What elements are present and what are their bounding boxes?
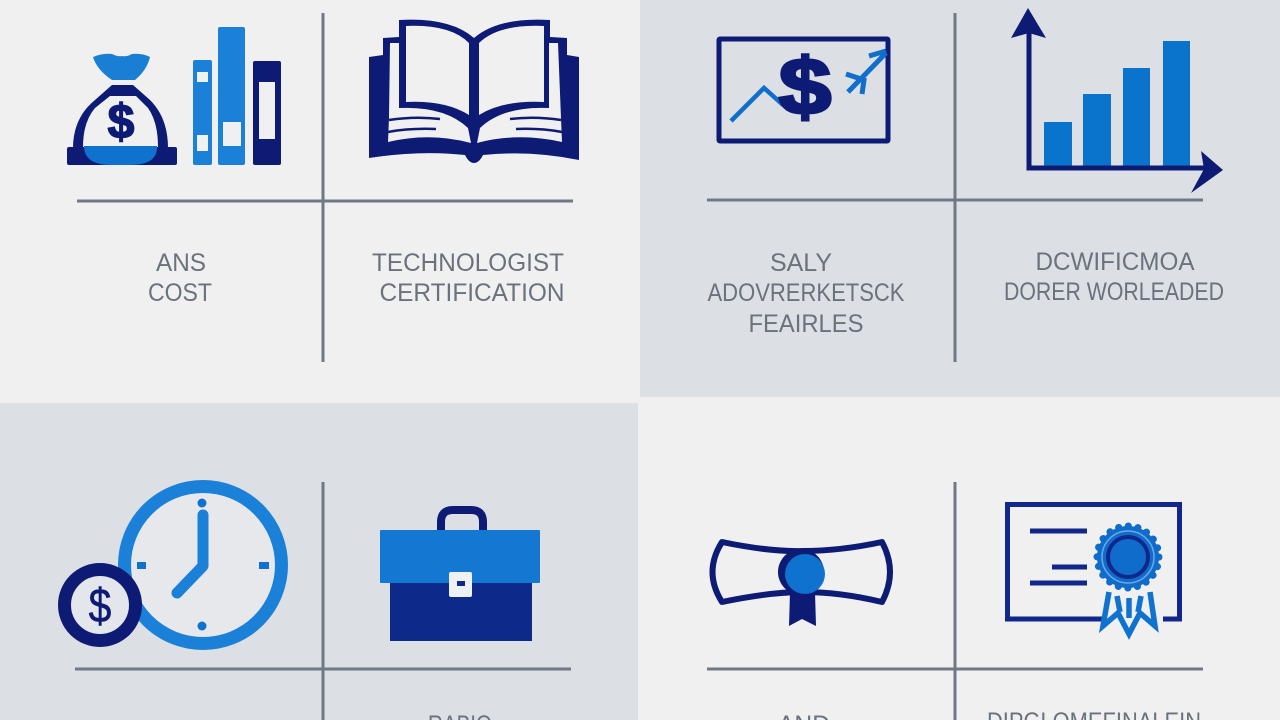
label: ans cost: ANS: [156, 249, 206, 277]
label: demand text: [1004, 248, 1224, 306]
panel: top left, cost and certification: [0, 0, 640, 400]
panel: top right, salary and demand: [640, 0, 1280, 397]
icon: money bag: [67, 54, 177, 165]
icon: certificate with rosette: [1008, 504, 1180, 634]
icon: money bag: $: [108, 96, 135, 149]
icon: banknote with dollar and rising arrow: $: [779, 42, 831, 131]
label: salary text: ADOVRERKETSCK: [708, 279, 905, 307]
icon: diploma scroll: [712, 542, 890, 626]
label: technologist certification: [372, 249, 564, 307]
label: technologist certification: CERTIFICATION: [380, 279, 564, 307]
icon: clock with coin: [64, 486, 282, 644]
label: ans cost: COST: [148, 279, 212, 307]
label: salary text: FEAIRLES: [748, 310, 864, 338]
icon: clock with coin: $: [89, 580, 112, 633]
label: technologist certification: TECHNOLOGIST: [372, 249, 564, 277]
panel: bottom right, diploma and certificate: [638, 400, 1280, 720]
chart: rising bars with axes: [1011, 8, 1223, 193]
label: ans cost: [148, 249, 212, 307]
icon: banknote with dollar and rising arrow: [719, 39, 888, 141]
label: salary text: SALY: [770, 249, 832, 277]
icon: stack of books: [193, 27, 281, 165]
label: demand text: DORER WORLEADED: [1004, 278, 1224, 306]
icon: open book: [369, 20, 579, 163]
label: salary text: [708, 249, 905, 338]
panel: bottom left, time and career: [0, 403, 638, 720]
label: demand text: DCWIFICMOA: [1036, 248, 1195, 276]
icon: briefcase: [380, 510, 540, 641]
